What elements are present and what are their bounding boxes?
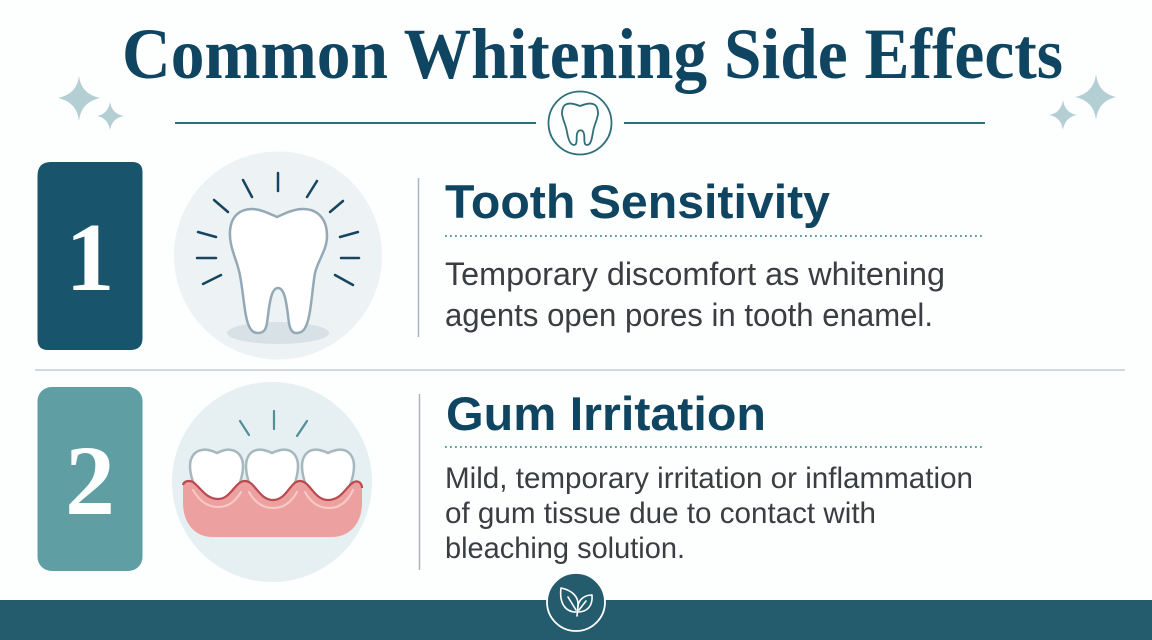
text: sensitivity description: agents open pores in tooth enamel. [445, 297, 933, 333]
dotted rule 1 [445, 235, 983, 237]
dotted rule 2 [445, 446, 983, 448]
panel: number card 2: 2 [65, 425, 115, 536]
icon: sensitive tooth [174, 152, 382, 360]
panel: number card 2 [38, 387, 142, 571]
heading: Tooth Sensitivity: Tooth Sensitivity [445, 175, 830, 228]
heading: Gum Irritation: Gum Irritation [446, 387, 766, 440]
text: sensitivity description [445, 256, 945, 333]
icon: irritated gums [172, 382, 372, 582]
text: gum irritation description: Mild, temporary irritation or inflammation [445, 462, 973, 495]
footer band [0, 600, 1152, 640]
icon: sparkles left [58, 76, 124, 130]
vertical rule 1 [418, 178, 420, 337]
text: sensitivity description: Temporary discomfort as whitening [445, 256, 945, 292]
panel: number card 1: 1 [66, 204, 114, 312]
text: gum irritation description: bleaching solution. [445, 532, 685, 565]
text: gum irritation description: of gum tissue due to contact with [445, 497, 876, 530]
title: Common Whitening Side Effects [122, 14, 1063, 94]
icon: leaf emblem [547, 573, 605, 631]
header divider with tooth emblem [175, 92, 985, 154]
vertical rule 2 [418, 394, 420, 570]
section divider [35, 369, 1125, 371]
text: gum irritation description [445, 462, 973, 565]
panel: number card 1 [38, 162, 142, 350]
icon: sparkles right [1049, 74, 1116, 130]
